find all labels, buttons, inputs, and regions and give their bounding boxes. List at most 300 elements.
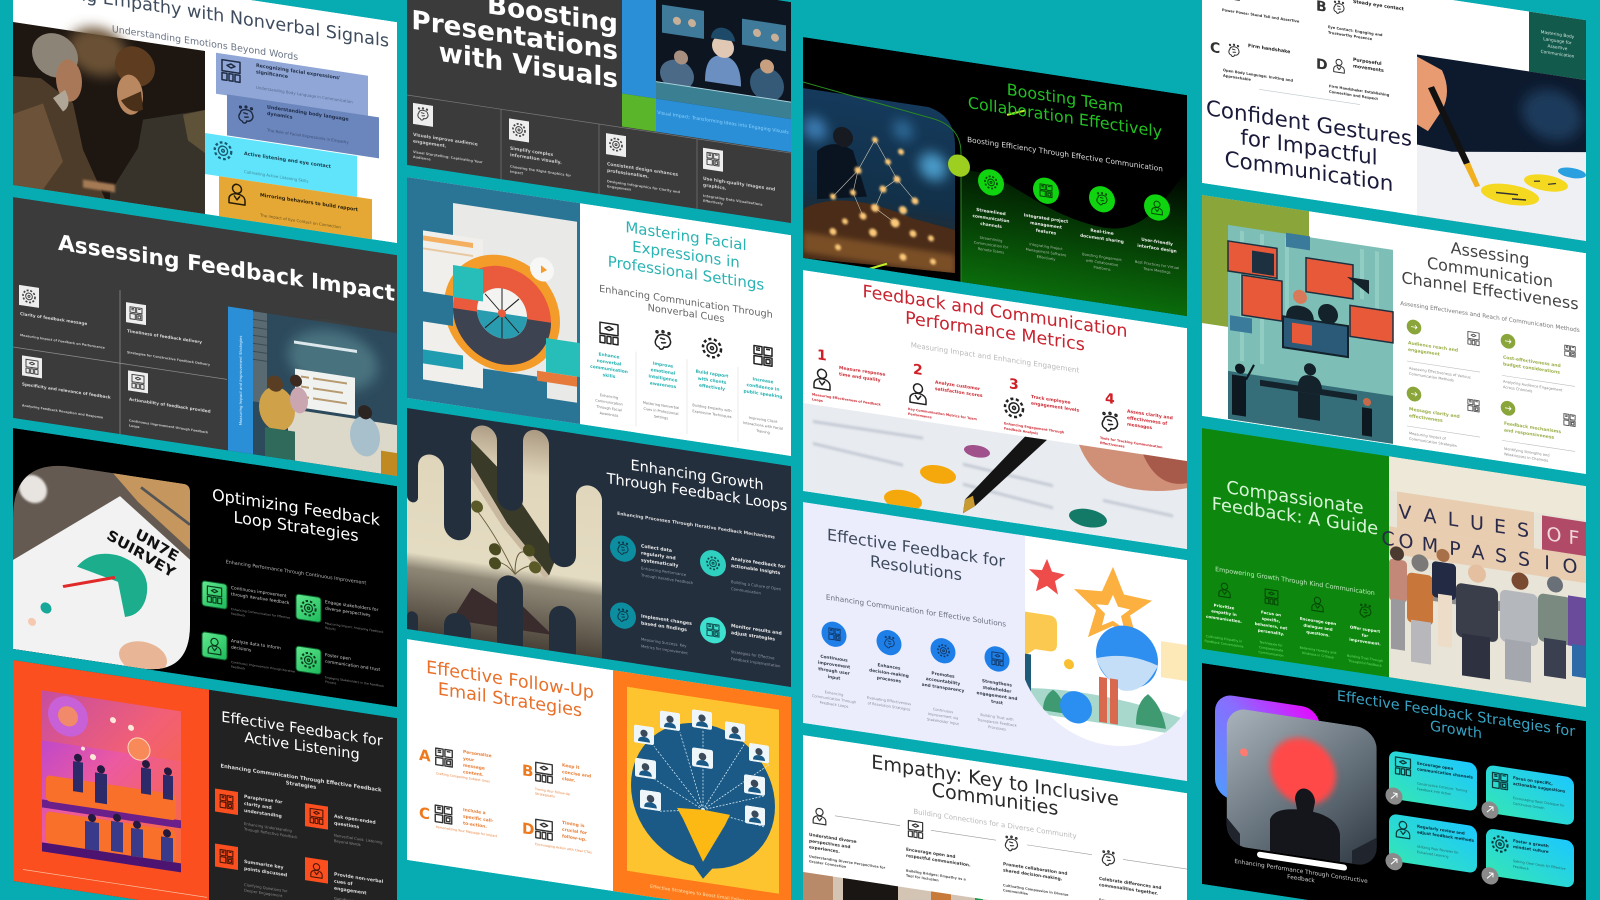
photo: futuristic meeting [656, 0, 791, 119]
item: Feedback mechanisms: Weaknesses in Channels [1504, 452, 1548, 463]
item: Active listening: Cultivating Active Listening Skills [244, 169, 308, 184]
item: Implement changes: based on findings [641, 620, 687, 633]
item: Focus on behaviors: personality. [1258, 628, 1285, 637]
photo: values of compassion blocks and figures: C [1381, 526, 1395, 551]
heading: Channel Effectiveness [1401, 268, 1579, 314]
item: Real-time sharing: document sharing [1080, 233, 1124, 245]
panel: Feedback and Communication Performance Metrics [803, 270, 1187, 553]
item: Recognizing facial expressions: significance [256, 69, 289, 80]
white bar [1257, 851, 1347, 871]
item: Summarize: Summarize key [244, 860, 283, 871]
metric 3: 3 [1009, 376, 1019, 394]
item B: clear. [562, 776, 576, 784]
item D: crucial for [562, 827, 588, 837]
card: Focus on suggestions [1482, 764, 1574, 831]
item: Feedback mechanisms: Identifying Strengths and [1504, 447, 1550, 458]
panel: Effective Feedback for Resolutions [803, 502, 1187, 781]
item: Offer support: improvement. [1349, 637, 1381, 647]
illustration: people on sofas [42, 690, 181, 872]
photo: community group [803, 872, 1187, 900]
item: Analyze data: Feedback [231, 664, 245, 671]
item B: concise and [562, 769, 591, 780]
item: Engage stakeholders: Results [325, 626, 336, 631]
photo: values of compassion blocks and figures [1381, 455, 1586, 707]
item: Promote collaboration: shared decision-making. [1003, 867, 1063, 882]
item: Enhance nonverbal: communication [590, 364, 628, 375]
item: Integrated features: management [1030, 220, 1062, 231]
item: Prioritize empathy: Cultivating Empathy in [1206, 634, 1242, 644]
item: Paraphrase: clarity and [244, 801, 272, 811]
heading: Loop Strategies [233, 507, 359, 545]
item: Streamlined channels: Communication for [974, 241, 1009, 250]
item: Real-time sharing: Real-time [1090, 228, 1114, 237]
item: Ask questions [305, 803, 383, 850]
subheading: Enhancing Communication for Effective Solutions [826, 593, 1006, 629]
item: Message clarity: effectiveness [1409, 413, 1443, 424]
heading: Effective Feedback Strategies for [1337, 688, 1575, 740]
caption: Enhancing Performance Through Constructive [1234, 859, 1368, 885]
photo: values of compassion blocks and figures: O [1547, 522, 1561, 547]
item: Audience reach: Assessing Effectiveness of Various [1409, 366, 1471, 380]
heading: Empathy: Key to Inclusive [871, 750, 1119, 811]
item: Enhance nonverbal: Awareness [600, 411, 619, 418]
tag box: Language for [1543, 36, 1572, 46]
item C: specific call- [463, 814, 494, 824]
photo: values of compassion blocks and figures: V [1399, 500, 1411, 525]
metric 2: 2 [913, 362, 923, 379]
photo: pen on form [803, 403, 1187, 553]
item: Increase confidence [743, 344, 783, 437]
item: Accountability: accountability [926, 676, 960, 687]
panel: Effective Feedback Strategies for Growth [1202, 663, 1586, 900]
item: Simplify [509, 118, 571, 183]
subheading: Enhancing Communication Through [599, 284, 773, 321]
item: Streamlined channels: communication [973, 213, 1009, 225]
gradient backing shape [1215, 693, 1320, 813]
item: Continuous improvement: Feedback [231, 611, 245, 618]
metric 1: 1 [817, 347, 827, 365]
item: Summarize: Clarifying Questions for [244, 883, 287, 894]
item: Paraphrase: Through Reflective Feedback [243, 827, 298, 840]
card: Regularly review [1386, 813, 1477, 883]
heading: Effective Feedback for [827, 525, 1005, 571]
item: Focus on behaviors: Focus on [1261, 609, 1281, 617]
item: Collect data: Collect data [641, 544, 672, 554]
heading: Effective Follow-Up [426, 658, 594, 703]
item A: content. [463, 769, 484, 778]
card: Regularly review: Utilizing Peer Reviews for [1417, 845, 1458, 855]
item: Actionability: Continuous Improvement through Feedback [129, 419, 208, 435]
item A: your [463, 756, 475, 764]
item: Emotional intelligence: Mastering Nonverbal [643, 401, 679, 410]
item: Understand perspectives: perspectives and [809, 838, 850, 850]
heading: for Impactful [1240, 125, 1378, 171]
photo: values of compassion blocks and figures: O [1399, 529, 1413, 554]
item B: Timing Your Follow-Up [535, 787, 570, 796]
heading: with Visuals [439, 37, 618, 95]
heading: Active Listening [244, 729, 360, 763]
metric 4: effectiveness of [1127, 415, 1167, 427]
item: Promote collaboration: Promote collaboration and [1003, 862, 1067, 877]
item: Engage stakeholders [296, 594, 384, 633]
item: Actionability: Actionability of feedback provided [129, 397, 211, 414]
item: Paraphrase: understanding [244, 808, 282, 820]
item: Emotional intelligence: emotional [651, 367, 676, 377]
tag box: Assertive [1548, 43, 1568, 52]
metric 2: Key Communication Metrics for Team [908, 407, 977, 421]
metric 3: Track employee [1031, 395, 1071, 406]
item: Cost-effectiveness: Analyzing Audience Engagement [1503, 380, 1562, 392]
item D: Timing is [562, 821, 584, 829]
panel: Boosting Team Collaboration Effectively [803, 37, 1187, 317]
item: Audience reach: engagement [1408, 347, 1441, 358]
item: Enhance nonverbal: Enhance [599, 352, 619, 361]
item: Monitor results: Monitor results and [731, 624, 782, 637]
subheading: Measuring Impact and Enhancing Engagement [911, 340, 1079, 375]
item: Prioritize empathy [1205, 580, 1244, 649]
photo: survey on clipboard: SUIRVEY [104, 526, 179, 582]
item D: D [522, 819, 534, 839]
item: Enhance nonverbal [590, 321, 628, 419]
item: Enhance nonverbal: Communication [595, 398, 623, 407]
panel: Optimizing Feedback Loop Strategies [13, 428, 397, 716]
item: Accountability: Promotes [931, 671, 955, 680]
item: Analyze data: decisions [231, 644, 252, 654]
item: Enhance nonverbal: Through Facial [595, 405, 622, 412]
item: Increase confidence: Training [755, 429, 770, 435]
item: Focus on behaviors: specific, [1262, 616, 1281, 624]
item: Paraphrase: Enhancing Understanding [244, 822, 292, 833]
item: Monitor results: Strategies for Effective [731, 649, 775, 661]
card: Focus on suggestions: Focus on specific, [1513, 775, 1553, 786]
item: Integrated features: Integrating Project [1029, 242, 1063, 251]
item: Recognizing facial expressions [216, 53, 368, 117]
item: Encourage dialogue: Balancing Honesty and [1300, 645, 1336, 655]
item: Foster open communication [296, 646, 384, 688]
item: Real-time sharing: with Collaborative [1086, 258, 1119, 267]
card: Regularly review: Enhanced Learning [1417, 850, 1448, 859]
item A: message [463, 763, 485, 772]
item: Specificity: Specificity and relevance of feedback [22, 381, 111, 400]
metric 4: messages [1127, 423, 1152, 431]
panel: Effective Follow-Up Email Strategies [407, 639, 791, 900]
heading: Expressions in [632, 238, 740, 272]
subheading: Assessing Effectiveness and Reach of Communication Methods [1400, 301, 1580, 334]
item: Continuous improvement: improvement [818, 660, 850, 671]
item: Build rapport: Building Empathy with [692, 403, 732, 413]
heading: Communities [932, 778, 1058, 820]
item: Summarize: Deeper Engagement [244, 888, 283, 898]
card: Focus on suggestions: actionable suggestions [1513, 781, 1566, 794]
item C [419, 800, 498, 838]
heading: Professional Settings [608, 252, 764, 294]
item: Implement changes [610, 601, 692, 656]
item: Integrated features [1024, 174, 1068, 263]
item: Visuals improve: Audience [413, 155, 431, 162]
green wave [961, 136, 1187, 316]
item: Ask questions: questions [334, 821, 360, 830]
item: Foster open communication: Foster open [325, 653, 351, 662]
heading: Email Strategies [438, 680, 582, 721]
heading: Assessing [1451, 238, 1529, 269]
item: Analyze data [202, 632, 295, 673]
metric 1: Measuring Effectiveness of Feedback [812, 392, 881, 407]
card: Regularly review: Regularly review and [1417, 824, 1465, 836]
metric 3: engagement levels [1031, 401, 1079, 414]
item: Consistent design: Designing Infographics for Clarity and [607, 179, 680, 194]
item: Engage stakeholders: Measuring Impact: Analyzing Feedback [325, 621, 383, 634]
item: Collect data: Enhancing Performance [641, 565, 686, 577]
item: Consistent design: Engagement [607, 184, 631, 192]
panel: Enhancing Growth Through Feedback Loops [407, 408, 791, 687]
card: Foster growth mindset: Foster a growth [1513, 838, 1549, 848]
item: Stakeholder trust [976, 643, 1018, 733]
heading: Compassionate [1226, 477, 1364, 519]
item C: C [419, 804, 430, 823]
card: Encourage channels: Constructive Criticism: Turning [1417, 782, 1467, 793]
item: Celebrate differences: commonalities together. [1099, 882, 1158, 897]
metric 2 [908, 361, 983, 427]
item: Celebrate differences [1099, 849, 1161, 900]
metric 2: Performance [908, 412, 932, 420]
item: Streamlined channels: Streamlined [976, 208, 1006, 217]
card: Foster growth mindset: mindset culture [1513, 844, 1549, 854]
photo: values of compassion blocks and figures: L [1448, 507, 1459, 532]
subheading: Enhancing Processes Through Iterative Feedback Mechanisms [617, 511, 775, 541]
item: Focus on behaviors: behaviors, not [1255, 621, 1287, 631]
item: Active listening: Active listening and eye contact [244, 151, 332, 170]
item: Stakeholder trust: Processes [988, 725, 1006, 732]
photo: values of compassion blocks and figures: F [1569, 526, 1579, 550]
heading: Confident Gestures [1206, 96, 1412, 152]
side band: Measuring Impact and Improvement Strategies [238, 335, 243, 426]
item B: Strategically [535, 792, 555, 799]
item: Paraphrase [215, 789, 298, 840]
item: Specificity [22, 355, 111, 421]
item: Recognizing facial expressions: Understanding Body Language in Communication [256, 85, 353, 104]
item: Analyze feedback: Analyze feedback for [731, 557, 785, 570]
item: Continuous improvement: Enhancing Communication for Effective [231, 607, 290, 620]
item: Build rapport: with clients [698, 376, 727, 386]
tag box: Mastering Body [1541, 30, 1574, 40]
item: Actionability: Loops [129, 424, 140, 429]
item: Clarity: Measuring Impact of Feedback on Performance [20, 333, 106, 350]
item: Consistent design [606, 133, 680, 199]
item: Foster open communication: Engaging Stakeholders in the Feedback [325, 675, 384, 688]
heading: Communication [1225, 147, 1393, 197]
item: Accountability [922, 635, 964, 727]
photo: two men talking [13, 15, 205, 214]
item C: C [1210, 40, 1220, 57]
item: Accountability: Continuous [933, 707, 953, 714]
item: Focus on behaviors: Techniques for [1259, 640, 1283, 648]
panel: Mastering Facial Expressions [407, 177, 791, 456]
item: Accountability: and transparency [922, 682, 964, 694]
item: Mirroring behaviors: The Impact of Eye Contact on Connection [259, 212, 341, 230]
item D: Firm Handshake: Establishing [1329, 84, 1389, 97]
item: Increase confidence: Interactions with Facial [743, 421, 783, 431]
item D: follow-up. [562, 833, 587, 843]
item: Encourage communication: Building Bridges: Empathy as a [906, 869, 966, 882]
metric 3 [1004, 375, 1079, 442]
item: User-friendly design [1135, 191, 1179, 276]
photo: values of compassion blocks and figures: E [1494, 514, 1506, 539]
item: Integrated features: Effectively [1037, 255, 1056, 262]
item: Analyze data: Analyze data to inform [231, 639, 281, 652]
item: Collect data: systematically [641, 557, 678, 569]
item: Encourage communication: respectful communication. [906, 853, 971, 869]
item: Encourage communication: Encourage open and [906, 848, 955, 860]
item: Cost-effectiveness: budget considerations [1503, 361, 1560, 376]
item: Visuals improve: Visuals improve audience [413, 133, 478, 148]
item: Audience reach: Audience reach and [1408, 341, 1458, 354]
item: Enhance nonverbal: Enhancing [600, 393, 618, 400]
caption band: Visual Impact: Transforming Ideas into Engaging Visuals [657, 110, 789, 136]
illustration: stars and people [1025, 536, 1187, 760]
item: Real-time sharing [1080, 183, 1124, 274]
item: High-quality images: Use high-quality images and [703, 177, 775, 193]
item: Build rapport: effectively [699, 383, 725, 392]
item: User-friendly design: User-friendly [1141, 238, 1173, 247]
card: Foster growth mindset [1482, 827, 1574, 897]
item B: Keep it [562, 763, 580, 771]
photo: values of compassion blocks and figures: O [1563, 554, 1577, 579]
panel: Empathy: Key to Inclusive Communities [803, 735, 1187, 900]
photo: values of compassion blocks and figures: P [1449, 536, 1461, 561]
item C: Personalizing Your Message for Impact [436, 825, 498, 838]
metric 3: Enhancing Engagement Through [1004, 421, 1064, 434]
subheading: Nonverbal Cues [648, 303, 724, 325]
item: Analyze data: Continuous Improvement through Iterative [231, 660, 295, 674]
item: Celebrate differences: Celebrate differences and [1099, 877, 1161, 891]
item: Summarize: points discussed [244, 866, 287, 878]
item C: Approachable [1223, 74, 1251, 82]
item: Visuals improve [413, 103, 483, 169]
item: User-friendly design: Team Meetings [1143, 267, 1171, 275]
item: High-quality images: graphics. [703, 182, 727, 192]
item: Feedback mechanisms [1501, 400, 1575, 467]
metric 1: time and quality [839, 371, 881, 384]
item: Visuals improve: engagement. [413, 138, 447, 150]
item: High-quality images [703, 148, 775, 206]
item: Foster open communication: communication and trust [325, 659, 380, 673]
item: Prioritize empathy: Prioritize [1214, 602, 1234, 611]
item: Increase confidence: Improving Client [749, 416, 777, 424]
heading: Feedback and Communication [862, 282, 1128, 342]
item: Real-time sharing: Platforms [1093, 265, 1111, 272]
item B: Eye Contact: Engaging and [1328, 25, 1383, 37]
item: Message clarity: Communication Strategies [1409, 437, 1457, 448]
caption: Feedback [1287, 874, 1315, 885]
item: Prioritize empathy: empathy in [1211, 608, 1237, 617]
subheading: Enhancing Communication Through Effective Feedback [221, 763, 381, 794]
item: Ask questions: Beyond Words [334, 839, 361, 847]
item: Increase confidence: Increase [752, 377, 774, 385]
item B [522, 756, 591, 804]
item: Recognizing facial expressions: Recognizing facial expressions' [256, 64, 340, 82]
heading: Collaboration Effectively [968, 93, 1162, 141]
item: Specificity: Analyzing Feedback Reception and Response [22, 403, 104, 420]
photo: meeting room [253, 311, 397, 476]
photo: glowing network [803, 82, 955, 281]
item C: Include a [463, 808, 486, 816]
card: Encourage channels [1386, 750, 1477, 817]
item: Continuous improvement: input [828, 674, 840, 682]
item: Accountability: Improvement via [928, 712, 958, 721]
item: Encourage dialogue: questions. [1306, 629, 1330, 638]
item: Implement changes: Metrics for Improvement [641, 643, 688, 656]
item: Offer support: Thoughtful Feedback [1347, 659, 1382, 668]
item: Monitor results: Feedback Implementation [731, 656, 781, 669]
item: Cost-effectiveness: Across Channels [1503, 385, 1533, 393]
item: High-quality images: Integrating Data Visualizations [703, 194, 763, 207]
item: Stakeholder trust: trust [991, 699, 1003, 706]
item: Decision-making: of Resolution Strategies [868, 701, 911, 712]
tag box: Communication [1541, 49, 1575, 60]
item: Emotional intelligence: awareness [650, 380, 677, 390]
item C [1210, 37, 1293, 88]
item: Cost-effectiveness [1501, 333, 1575, 400]
item: Continuous improvement: through user [818, 666, 851, 677]
item B: Steady eye contact [1353, 0, 1405, 13]
metric 2: Analyze customer [935, 380, 980, 392]
item B: Trustworthy Presence [1328, 31, 1373, 41]
item D: Connection and Respect [1329, 90, 1378, 101]
item: Audience reach [1407, 319, 1479, 386]
item: Stakeholder trust: Strengthens [982, 679, 1012, 689]
heading: Feedback: A Guide [1212, 494, 1378, 540]
item: Engage stakeholders: Engage stakeholders for [325, 600, 378, 613]
heading: Performance Metrics [905, 309, 1085, 356]
card: Encourage channels: Encourage open [1417, 761, 1453, 771]
illustration: tree and pills [407, 408, 602, 658]
photo: values of compassion blocks and figures: S [1495, 543, 1507, 568]
item: Timeliness [126, 302, 211, 367]
item: Continuous improvement: Feedback Loops [820, 701, 848, 709]
item: Cost-effectiveness: Cost-effectiveness and [1503, 356, 1561, 369]
heading: Optimizing Feedback [212, 485, 380, 529]
photo: survey on clipboard [13, 466, 190, 670]
photo: values of compassion blocks and figures: S [1517, 518, 1529, 542]
item C: to-action. [463, 820, 487, 830]
photo: values of compassion blocks and figures: M [1422, 532, 1438, 558]
item: Visuals improve: Visual Storytelling: Captivating Your [413, 150, 483, 164]
panel: Building Empathy with Nonverbal Signals [13, 0, 397, 244]
item: Offer support: Building Trust Through [1347, 654, 1383, 663]
item: Engage stakeholders: diverse perspectives [325, 606, 371, 619]
item: Non-verbal cues: engagement [334, 886, 367, 897]
item: Understand perspectives [809, 807, 886, 875]
item: Foster open communication: Process [325, 680, 337, 685]
card: Encourage channels: Feedback into Action [1417, 787, 1451, 796]
item: Non-verbal cues [305, 857, 384, 900]
subheading: Empowering Growth Through Kind Communication [1215, 566, 1375, 597]
item: Continuous improvement: through iterative feedback [231, 591, 290, 606]
metric 4 [1100, 390, 1173, 456]
item: Emotional intelligence [643, 328, 679, 422]
item: Build rapport: Expressive Techniques [692, 409, 732, 419]
item: Encourage dialogue: Kindness in Critique [1302, 651, 1334, 660]
item: Enhance nonverbal: skills [603, 372, 616, 380]
caption band [656, 99, 791, 152]
item: Streamlined channels [973, 167, 1009, 256]
item: Collect data [610, 534, 694, 585]
item: Implement changes: Measuring Success: Key [641, 636, 687, 648]
metric 4: Effectiveness [1100, 441, 1125, 449]
heading: Boosting Team [1007, 80, 1123, 116]
subheading: Strategies [286, 780, 316, 791]
item: Emotional intelligence: intelligence [649, 373, 678, 384]
